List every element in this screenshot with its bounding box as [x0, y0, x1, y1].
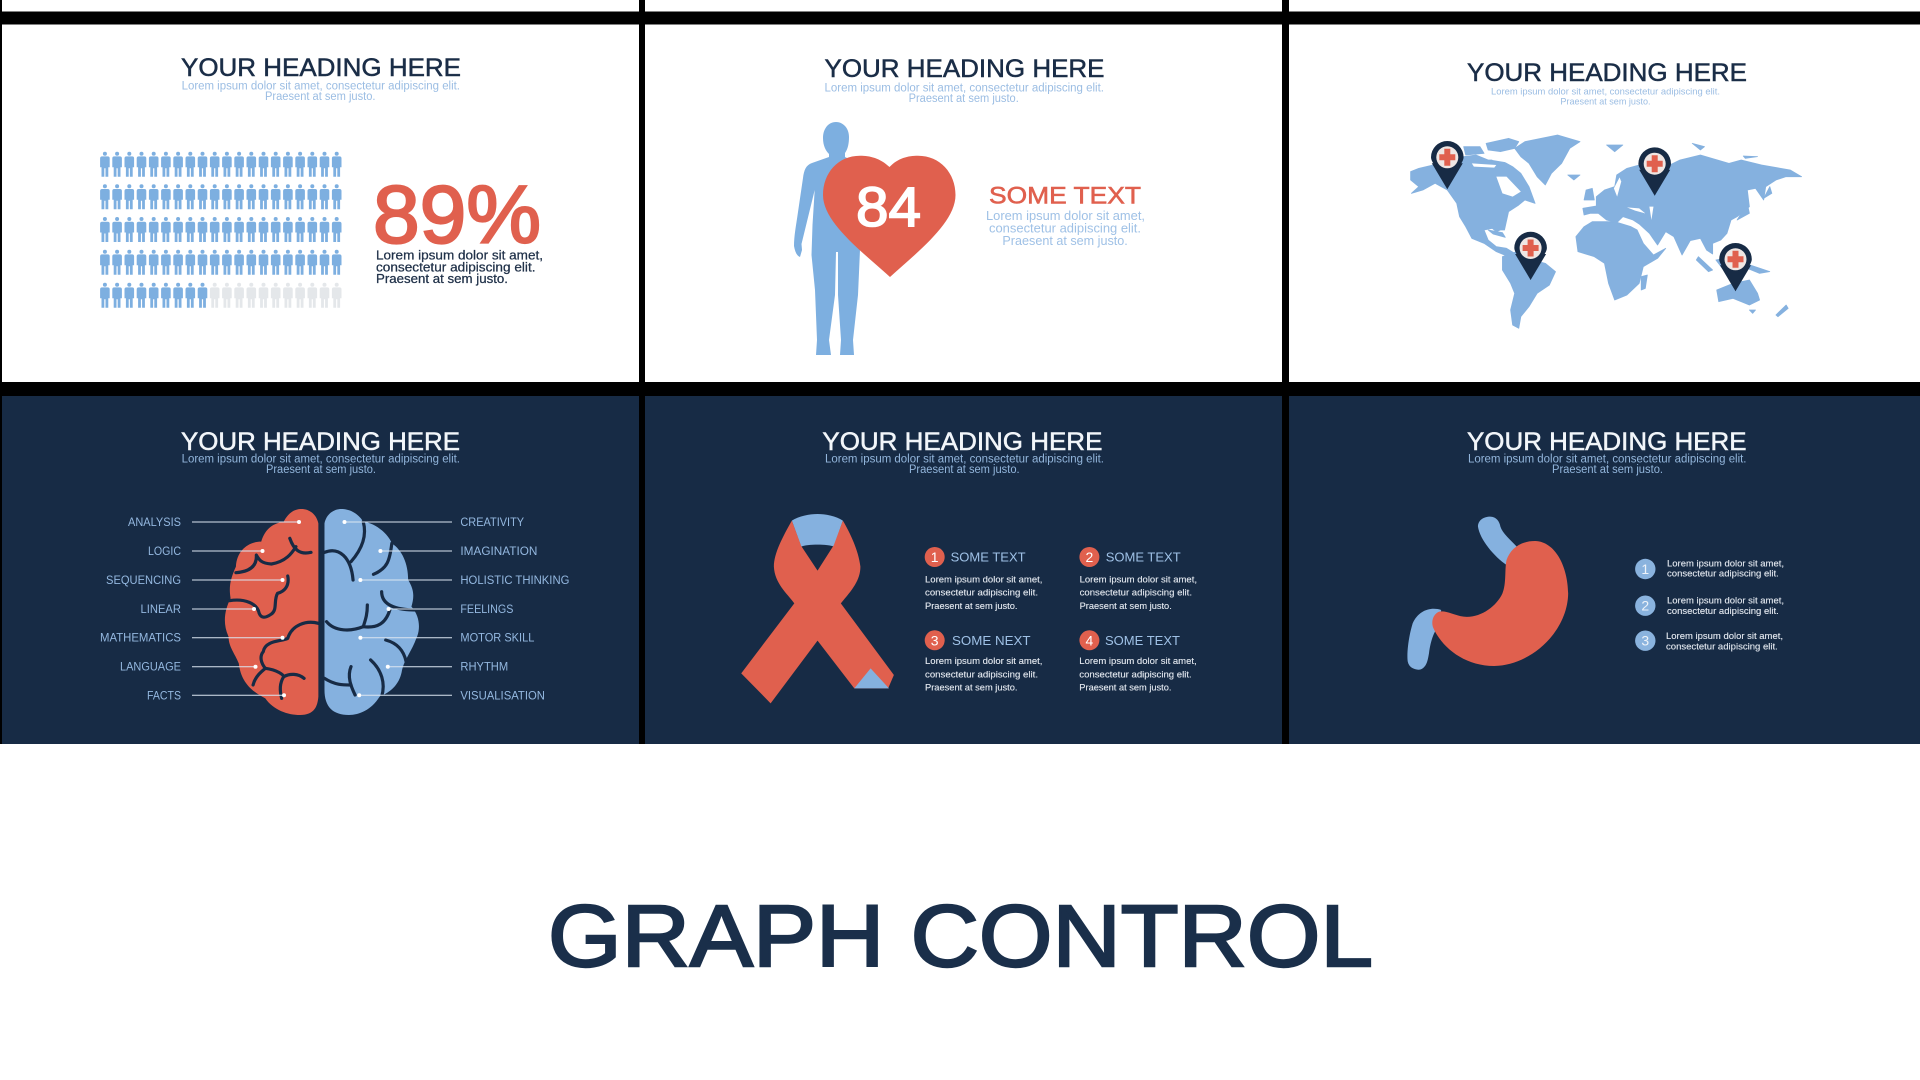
- description: Lorem ipsum dolor sit amet,: [376, 248, 543, 262]
- left brain labels: SEQUENCING: [106, 575, 181, 587]
- big percentage: 89%: [373, 170, 541, 260]
- subheading: Lorem ipsum dolor sit amet, consectetur adipiscing elit.: [824, 82, 1104, 94]
- callout text: Lorem ipsum dolor sit amet,: [986, 209, 1145, 223]
- list item 3: 3: [1641, 633, 1649, 649]
- item 2: Lorem ipsum dolor sit amet,: [1080, 574, 1197, 585]
- icon: ribbon: [741, 514, 894, 703]
- right brain labels: IMAGINATION: [460, 546, 537, 558]
- icon: map pin Russia: [1638, 147, 1671, 196]
- right hemisphere: [324, 509, 419, 715]
- icon: stomach: [1407, 517, 1568, 670]
- subheading: Lorem ipsum dolor sit amet, consectetur adipiscing elit.: [182, 454, 460, 466]
- callout text: Praesent at sem justo.: [1002, 234, 1128, 248]
- subheading: Praesent at sem justo.: [266, 464, 376, 476]
- item 3: Praesent at sem justo.: [925, 683, 1018, 694]
- list item 1: 1: [1641, 561, 1649, 577]
- left brain labels: LANGUAGE: [120, 662, 181, 674]
- panel: top strip remnants: [2, 0, 1920, 12]
- item 1: [925, 547, 1042, 612]
- subheading: Praesent at sem justo.: [1552, 464, 1663, 476]
- item 2: Praesent at sem justo.: [1080, 601, 1172, 612]
- panel: brain: [2, 396, 639, 744]
- item 3: SOME NEXT: [952, 633, 1031, 648]
- subheading: Lorem ipsum dolor sit amet, consectetur adipiscing elit.: [182, 80, 460, 92]
- item 1: consectetur adipiscing elit.: [925, 588, 1038, 599]
- icon: brain: [225, 509, 419, 715]
- heading: YOUR HEADING HERE: [1467, 428, 1746, 456]
- heart value: 84: [856, 175, 921, 238]
- panel: awareness ribbon: [645, 396, 1282, 744]
- icon: map pin Australia: [1719, 243, 1752, 291]
- panel: 89 percent people chart: [2, 24, 639, 382]
- heading: YOUR HEADING HERE: [822, 428, 1102, 456]
- subheading: Lorem ipsum dolor sit amet, consectetur adipiscing elit.: [1491, 86, 1720, 97]
- subheading: [824, 82, 1104, 105]
- heading: YOUR HEADING HERE: [1467, 59, 1747, 87]
- subheading: Praesent at sem justo.: [909, 464, 1020, 476]
- brain folds: [229, 522, 416, 698]
- list item 1: [1635, 558, 1784, 580]
- subheading: Lorem ipsum dolor sit amet, consectetur adipiscing elit.: [825, 454, 1104, 466]
- item 2: SOME TEXT: [1106, 550, 1181, 565]
- brain leader lines: [192, 520, 452, 697]
- left brain labels: ANALYSIS: [128, 517, 181, 529]
- list item 2: 2: [1641, 598, 1649, 614]
- right brain labels: FEELINGS: [460, 604, 514, 616]
- item 4: Praesent at sem justo.: [1079, 683, 1172, 694]
- item 1: 1: [931, 549, 939, 565]
- item 4: [1079, 630, 1197, 694]
- list item 2: Lorem ipsum dolor sit amet,: [1667, 596, 1784, 607]
- left brain labels: MATHEMATICS: [100, 633, 181, 645]
- list item 3: Lorem ipsum dolor sit amet,: [1666, 631, 1783, 642]
- item 2: 2: [1086, 549, 1094, 565]
- item 1: Lorem ipsum dolor sit amet,: [925, 574, 1042, 585]
- item 4: consectetur adipiscing elit.: [1079, 669, 1192, 680]
- right brain labels: VISUALISATION: [460, 690, 545, 702]
- subheading: Lorem ipsum dolor sit amet, consectetur adipiscing elit.: [1468, 454, 1746, 466]
- callout text: [986, 209, 1145, 248]
- left hemisphere: [225, 509, 318, 715]
- item 3: consectetur adipiscing elit.: [925, 669, 1038, 680]
- icon: map pin South America: [1514, 232, 1547, 280]
- item 1: SOME TEXT: [951, 550, 1026, 565]
- subheading: Praesent at sem justo.: [1560, 96, 1651, 107]
- item 4: SOME TEXT: [1105, 633, 1180, 648]
- panel: stomach: [1289, 396, 1920, 744]
- item 1: Praesent at sem justo.: [925, 601, 1018, 612]
- right brain labels: CREATIVITY: [460, 517, 524, 529]
- list item 1: Lorem ipsum dolor sit amet,: [1667, 558, 1784, 569]
- subheading: [182, 454, 460, 476]
- item 3: 3: [931, 632, 939, 648]
- heading: YOUR HEADING HERE: [181, 54, 461, 82]
- left brain labels: [100, 517, 181, 702]
- heading: YOUR HEADING HERE: [824, 55, 1104, 83]
- icon: map pin Alaska: [1431, 141, 1464, 189]
- right brain labels: [460, 517, 569, 702]
- list item 2: consectetur adipiscing elit.: [1667, 606, 1779, 617]
- icon: heart: [823, 156, 956, 277]
- pictogram: 89 of 100 people: [100, 152, 342, 308]
- description: consectetur adipiscing elit.: [376, 260, 536, 274]
- panel: world map: [1289, 24, 1920, 382]
- panel: human figure with heart: [645, 24, 1282, 382]
- subheading: [182, 80, 460, 103]
- callout title: SOME TEXT: [989, 182, 1141, 210]
- world map: [1411, 135, 1802, 328]
- item 4: Lorem ipsum dolor sit amet,: [1079, 656, 1197, 667]
- description: Praesent at sem justo.: [376, 272, 508, 286]
- callout text: consectetur adipiscing elit.: [989, 221, 1141, 235]
- title: GRAPH CONTROL: [548, 888, 1373, 985]
- right brain labels: RHYTHM: [460, 662, 508, 674]
- subheading: [1491, 86, 1720, 107]
- left brain labels: LOGIC: [148, 546, 181, 558]
- right brain labels: MOTOR SKILL: [460, 633, 535, 645]
- item 2: consectetur adipiscing elit.: [1080, 588, 1192, 599]
- item 3: Lorem ipsum dolor sit amet,: [925, 656, 1042, 667]
- heading: YOUR HEADING HERE: [181, 428, 460, 456]
- item 3: [925, 630, 1042, 694]
- list item 2: [1635, 596, 1784, 617]
- left brain labels: FACTS: [147, 690, 181, 702]
- left brain labels: LINEAR: [140, 604, 181, 616]
- list item 1: consectetur adipiscing elit.: [1667, 569, 1779, 580]
- right brain labels: HOLISTIC THINKING: [460, 575, 569, 587]
- subheading: [1468, 454, 1746, 476]
- description: [376, 248, 543, 286]
- subheading: Praesent at sem justo.: [909, 93, 1019, 105]
- icon: human silhouette: [794, 122, 872, 355]
- list item 3: consectetur adipiscing elit.: [1666, 641, 1778, 652]
- list item 3: [1635, 630, 1783, 652]
- subheading: Praesent at sem justo.: [265, 91, 376, 103]
- item 4: 4: [1086, 632, 1094, 648]
- item 2: [1079, 547, 1197, 612]
- subheading: [825, 454, 1104, 476]
